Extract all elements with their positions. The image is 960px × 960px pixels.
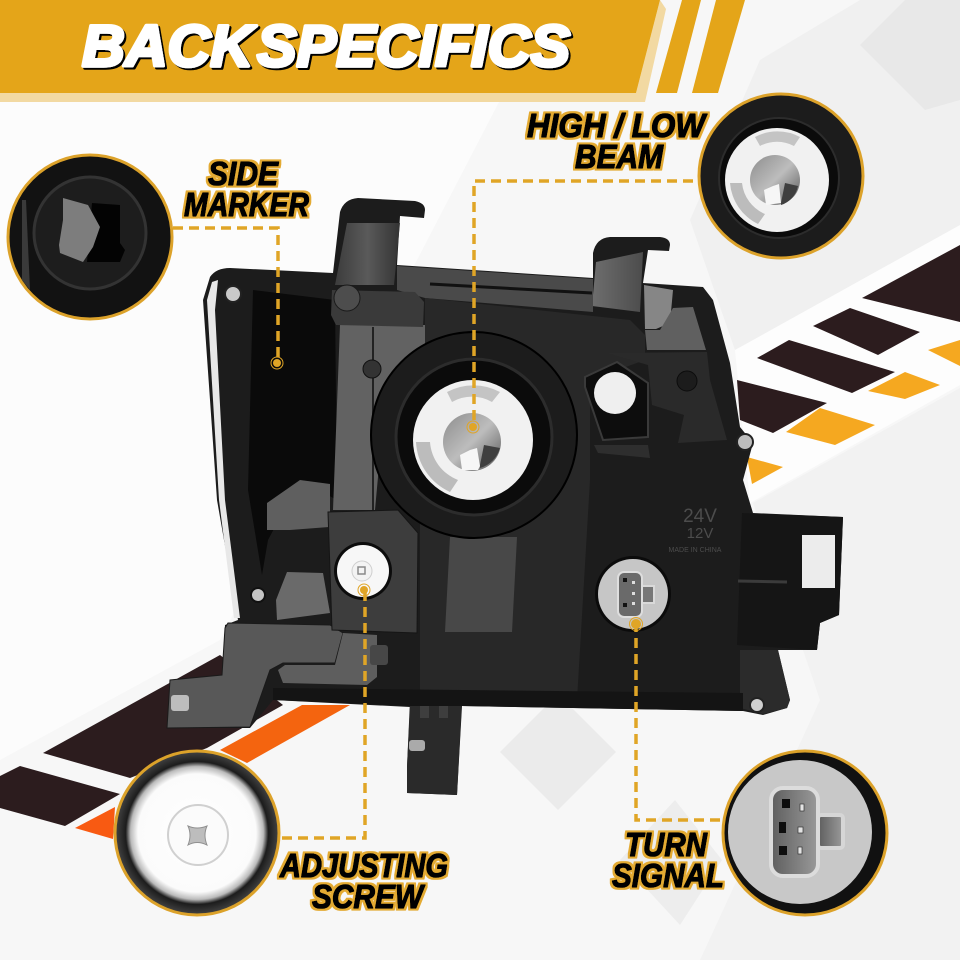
label: high low beam: HIGH / LOW: [527, 107, 708, 144]
headlight assembly: [167, 198, 843, 795]
top strip: [397, 266, 593, 312]
base trim strip: [273, 688, 743, 711]
bulb socket: [413, 380, 533, 500]
callout circle: adjusting screw: [115, 751, 279, 915]
left mounting tab bolt: [171, 695, 189, 711]
label: high low beam: [527, 107, 708, 175]
label: turn signal: SIGNAL: [612, 857, 724, 894]
lower mounting tab: [407, 694, 462, 795]
clear lens edge: [207, 280, 240, 618]
label: high low beam: BEAM: [575, 138, 664, 175]
adjusting screw plate: [328, 510, 418, 633]
leader: side marker: [173, 228, 283, 369]
label: adjusting screw: [279, 847, 448, 915]
column pin: [363, 360, 381, 378]
title: BACK: [82, 14, 257, 79]
left bracket stem: [335, 223, 400, 285]
label: turn signal: [612, 826, 724, 894]
moulded text: 24V: [683, 506, 717, 527]
label: side marker: MARKER: [184, 186, 309, 223]
title banner: [0, 0, 745, 102]
label: side marker: SIDE: [208, 155, 279, 192]
bracket knob: [334, 285, 360, 311]
right side box: [737, 513, 843, 714]
moulded text: MADE IN CHINA: [669, 547, 722, 554]
leader: adjusting screw: [282, 584, 370, 838]
right bracket stem: [592, 252, 643, 312]
moulded text: [669, 506, 722, 554]
turn signal socket: [595, 556, 671, 632]
moulded text: 12V: [687, 525, 713, 542]
label: turn signal: TURN: [625, 826, 708, 863]
label: side marker: [184, 155, 309, 223]
gray lower panel: [445, 537, 517, 632]
callout circle: turn signal: [723, 751, 887, 915]
housing silhouette: [167, 198, 843, 795]
rear plate: [420, 298, 645, 700]
lower-left bracket: [167, 623, 388, 728]
background stripes: right: [735, 225, 960, 503]
black recess: [248, 290, 337, 575]
gray column: [333, 325, 425, 510]
callout circle: high low beam: [699, 94, 863, 258]
main lamp ring: [371, 332, 577, 538]
clip bracket: [594, 352, 727, 458]
title: SPECIFICS: [257, 14, 570, 79]
small bulb socket: [585, 362, 648, 440]
callout circle: side marker: [8, 155, 172, 319]
upper window: [644, 285, 673, 329]
bracket cross piece: [331, 290, 424, 327]
background stripes: bottom left: [0, 655, 350, 839]
label: adjusting screw: SCREW: [312, 878, 426, 915]
screws: [225, 286, 764, 712]
title: [82, 14, 570, 79]
label: adjusting screw: ADJUSTING: [279, 847, 448, 884]
gray wedge left: [267, 480, 330, 620]
banner stripes: [656, 0, 745, 93]
leader: high low beam: [467, 181, 693, 433]
leader: turn signal: [630, 618, 720, 820]
